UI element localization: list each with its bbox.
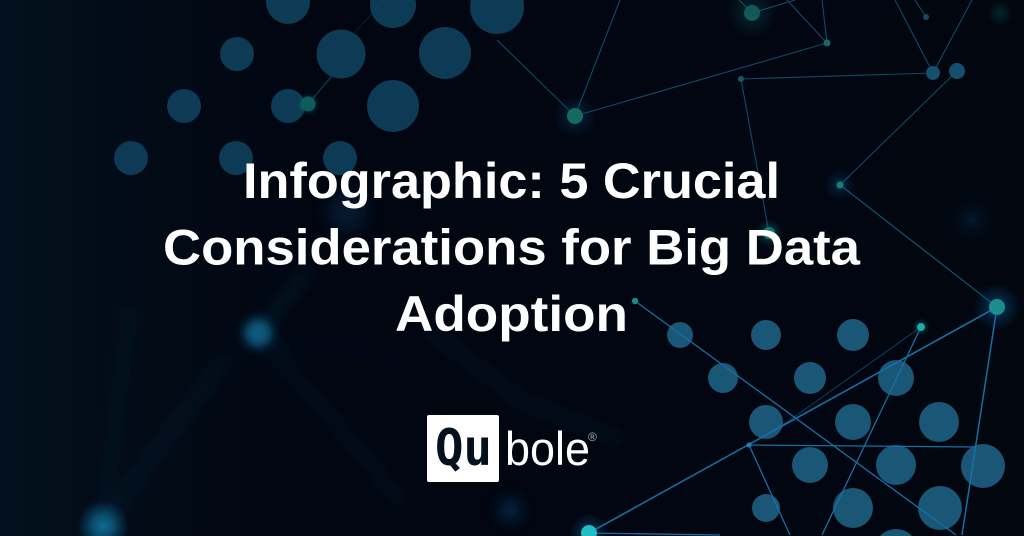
dot grid bottom right xyxy=(667,319,1005,536)
dot grid top left xyxy=(114,0,524,175)
title: Adoption xyxy=(395,286,628,342)
blurred network bottom left xyxy=(77,192,620,536)
logo: Qubole xyxy=(427,415,597,482)
logo letters bole: bole xyxy=(505,422,590,475)
logo letters Qu: Qu xyxy=(435,419,492,477)
title: Considerations for Big Data xyxy=(163,220,861,276)
registered mark: ® xyxy=(588,430,597,444)
network bottom right xyxy=(569,283,1021,536)
network top right xyxy=(497,0,1013,307)
title: Infographic: 5 Crucial xyxy=(243,153,780,209)
network top left node xyxy=(296,0,385,116)
logo badge xyxy=(427,415,499,482)
title xyxy=(163,153,861,342)
